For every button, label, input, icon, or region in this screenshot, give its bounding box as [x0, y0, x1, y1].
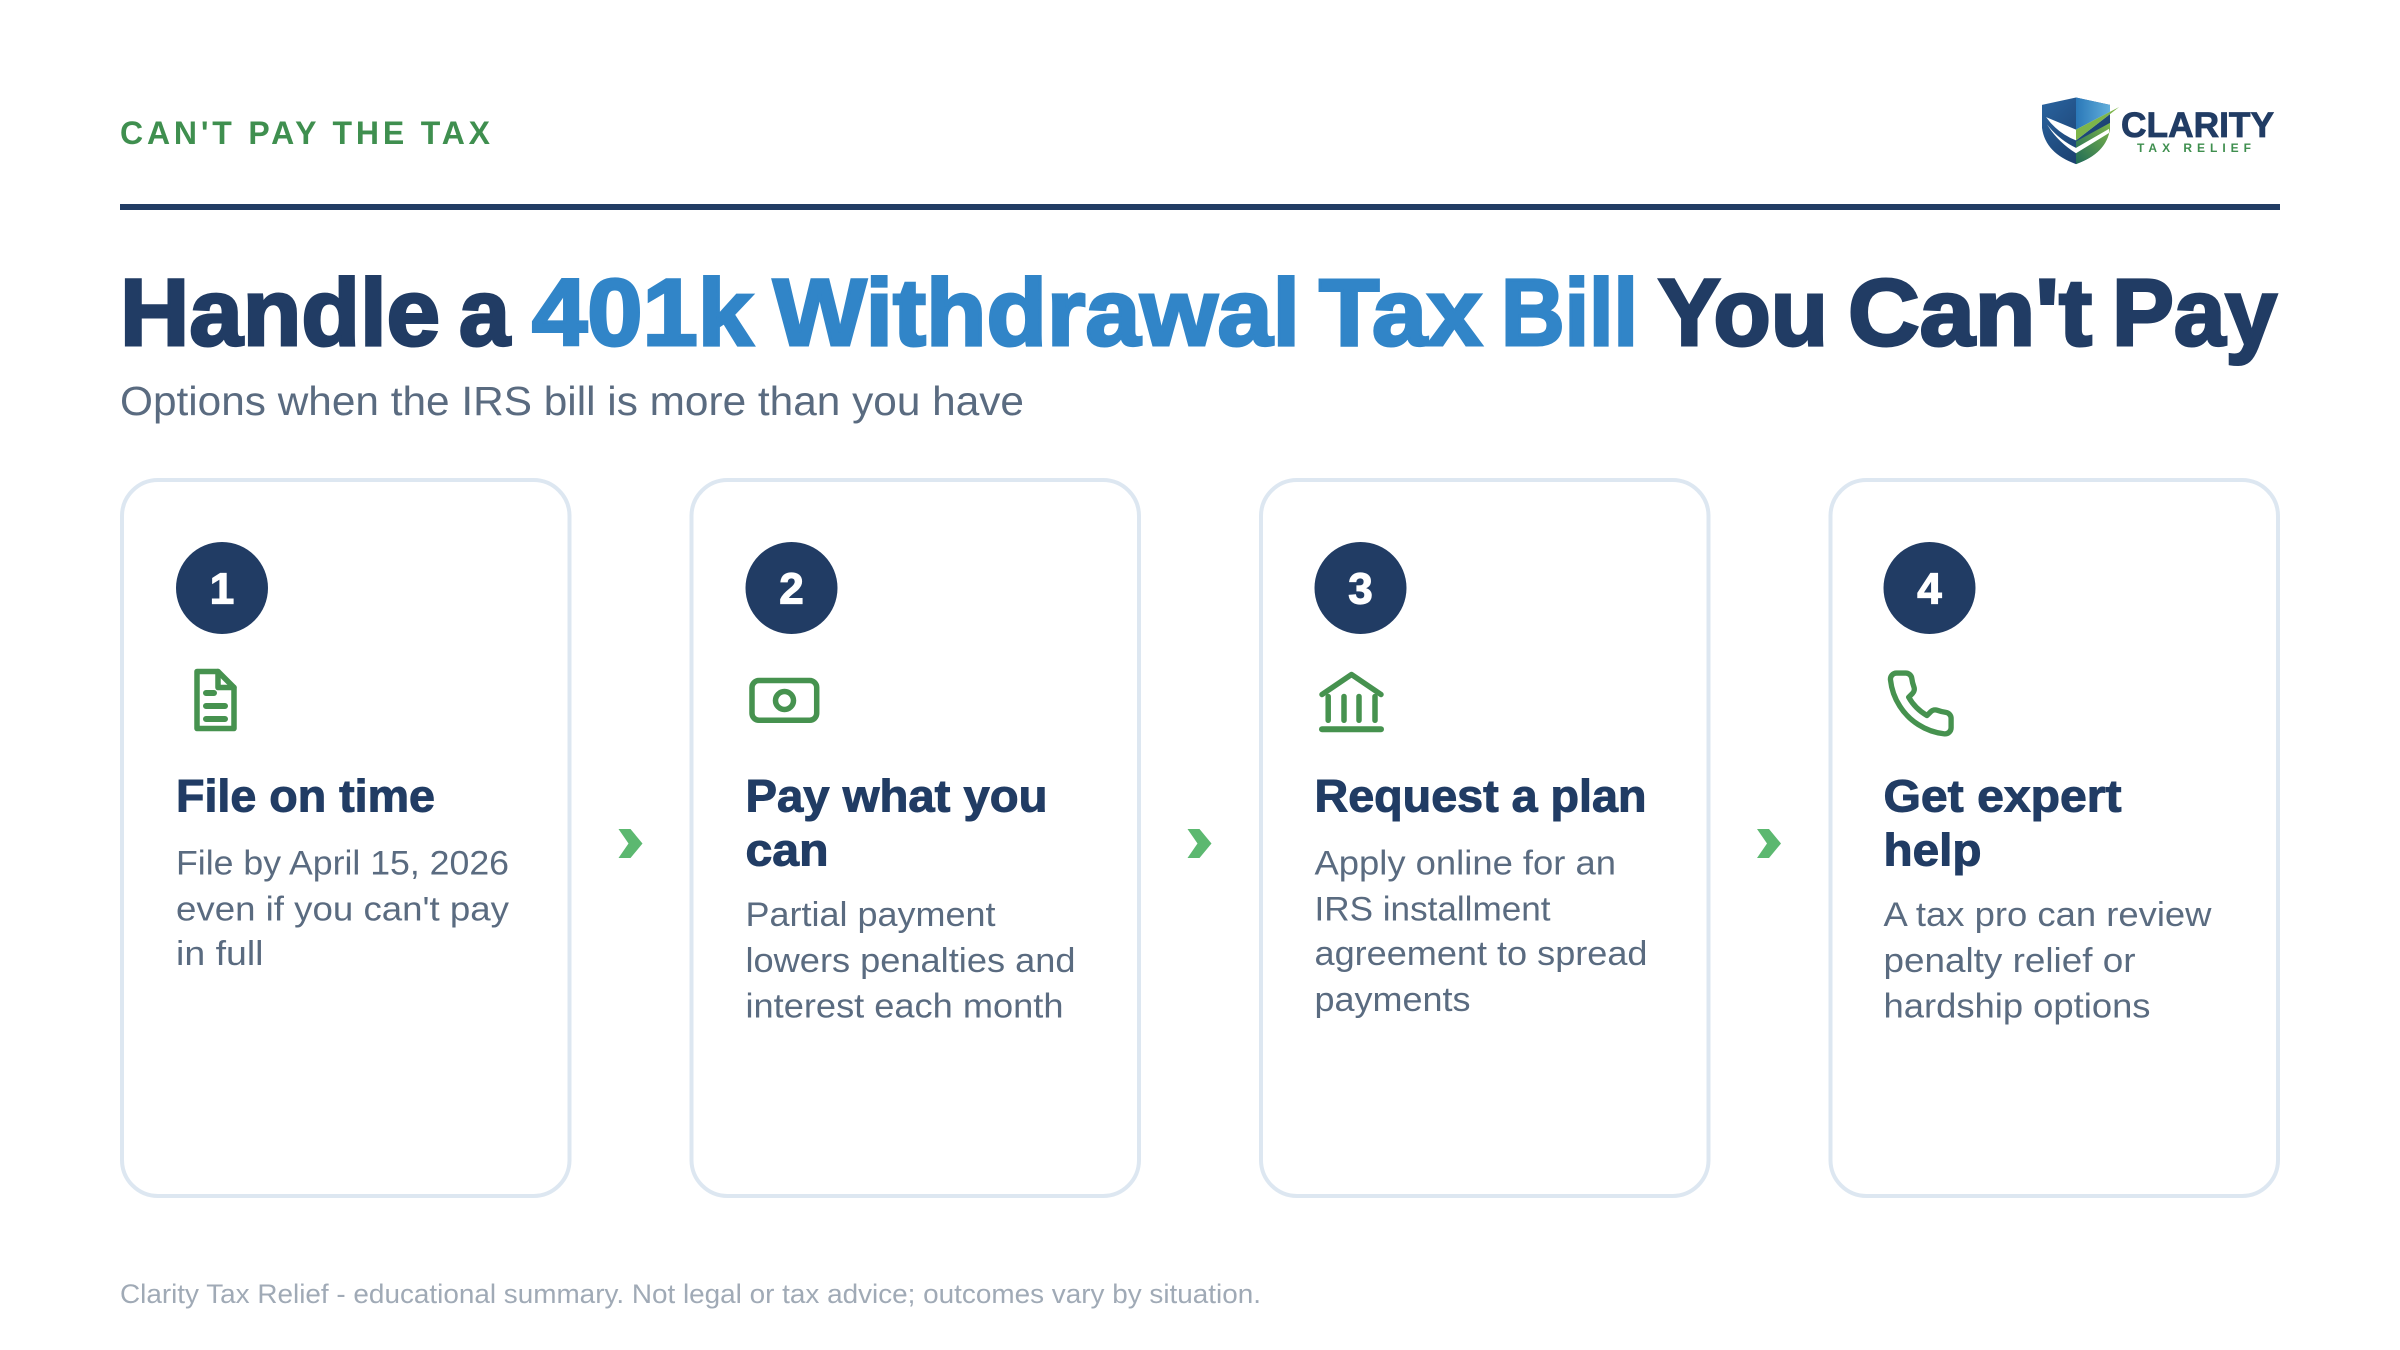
step 1 number badge: 1	[210, 564, 234, 614]
step 3 description: IRS installment	[1314, 890, 1551, 928]
arrow 3	[1757, 829, 1781, 858]
logo tagline: TAX RELIEF	[2137, 141, 2251, 155]
logo: Clarity Tax Relief	[2042, 98, 2274, 164]
step 4 heading: help	[1884, 824, 1982, 876]
step 2 description	[746, 896, 1076, 1026]
footer disclaimer: Clarity Tax Relief - educational summary. Not legal or tax advice; outcomes vary by situation.	[120, 1279, 1261, 1309]
step 2 heading: can	[746, 824, 828, 876]
panel: step 2	[692, 480, 1139, 1196]
eyebrow label: CAN'T PAY THE TAX	[120, 115, 491, 151]
title: Handle	[120, 260, 440, 366]
step 2 description: lowers penalties and	[746, 942, 1076, 980]
icon: banknote	[752, 680, 817, 720]
panel: step 4	[1830, 480, 2278, 1196]
step 4 number badge: 4	[1917, 564, 1942, 614]
icon: bank building	[1322, 674, 1381, 729]
title: a	[459, 260, 511, 366]
step 2 number badge	[746, 542, 838, 634]
subtitle: Options when the IRS bill is more than you have	[120, 378, 1024, 424]
step 3 description	[1314, 844, 1648, 1019]
arrow 2	[1188, 829, 1212, 858]
title: Pay	[2112, 260, 2277, 366]
title: 401k	[532, 260, 753, 366]
title: Withdrawal	[773, 260, 1300, 366]
step 4 description	[1884, 896, 2212, 1026]
step 4 description: hardship options	[1884, 988, 2150, 1026]
step 3 number badge	[1314, 542, 1406, 634]
step 4 heading	[1884, 770, 2122, 876]
step 2 number badge: 2	[779, 564, 804, 614]
step 3 description: Apply online for an	[1314, 844, 1616, 882]
step 4 number badge	[1884, 542, 1976, 634]
header rule	[120, 204, 2280, 210]
step 2 description: interest each month	[746, 988, 1064, 1026]
step 1 description	[176, 844, 509, 973]
step 2 heading: Pay what you	[746, 770, 1048, 822]
step 4 description: penalty relief or	[1884, 942, 2136, 980]
step 3 heading: Request a plan	[1314, 770, 1646, 822]
title: Can't	[1848, 260, 2092, 366]
step 2 heading	[746, 770, 1048, 876]
step 1 description: even if you can't pay	[176, 890, 509, 928]
step 3 description: payments	[1314, 981, 1470, 1019]
panel: step 3	[1261, 480, 1708, 1196]
title: Tax	[1319, 260, 1482, 366]
step 1 number badge	[176, 542, 268, 634]
icon: shield with check	[2042, 98, 2119, 164]
logo wordmark: CLARITY	[2121, 106, 2274, 145]
step 1 heading: File on time	[176, 770, 435, 822]
title	[120, 260, 2277, 366]
step 1 description: in full	[176, 935, 264, 973]
panel: step 1	[122, 480, 570, 1196]
title: Bill	[1501, 260, 1638, 366]
step 2 description: Partial payment	[746, 896, 996, 934]
arrow 1	[618, 829, 642, 858]
icon: phone	[1890, 673, 1951, 734]
icon: document	[197, 672, 234, 728]
title: You	[1658, 260, 1828, 366]
step 3 description: agreement to spread	[1314, 935, 1648, 973]
step 3 number badge: 3	[1348, 564, 1373, 614]
step 4 heading: Get expert	[1884, 770, 2122, 822]
step 4 description: A tax pro can review	[1884, 896, 2212, 934]
step 1 description: File by April 15, 2026	[176, 844, 509, 882]
